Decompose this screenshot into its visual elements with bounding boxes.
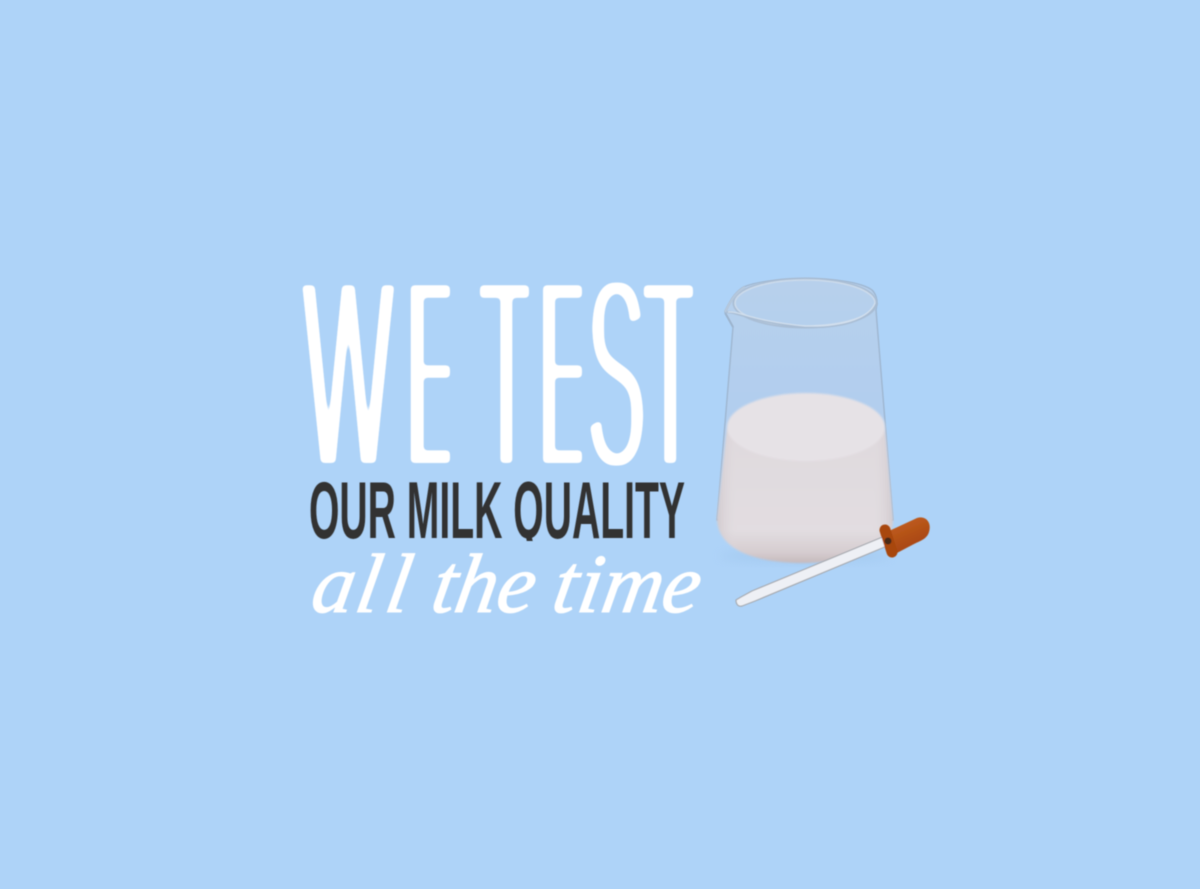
jug rim <box>725 279 877 327</box>
milk <box>717 393 893 563</box>
tagline: all the time: all the time <box>306 539 709 631</box>
dropper glass tube <box>736 536 887 606</box>
infographic canvas: OUR MILK QUALITY <box>309 466 685 556</box>
jug shadow <box>719 549 891 563</box>
title: WE TEST <box>302 282 694 466</box>
jug glass body <box>717 279 893 520</box>
icon: glass jug of milk <box>717 279 893 563</box>
title: WE TEST: TEST <box>480 225 697 525</box>
icon: dropper <box>736 517 930 606</box>
dropper rubber bulb <box>884 517 930 554</box>
title: WE TEST: WE <box>303 223 469 524</box>
infographic canvas <box>302 277 930 614</box>
